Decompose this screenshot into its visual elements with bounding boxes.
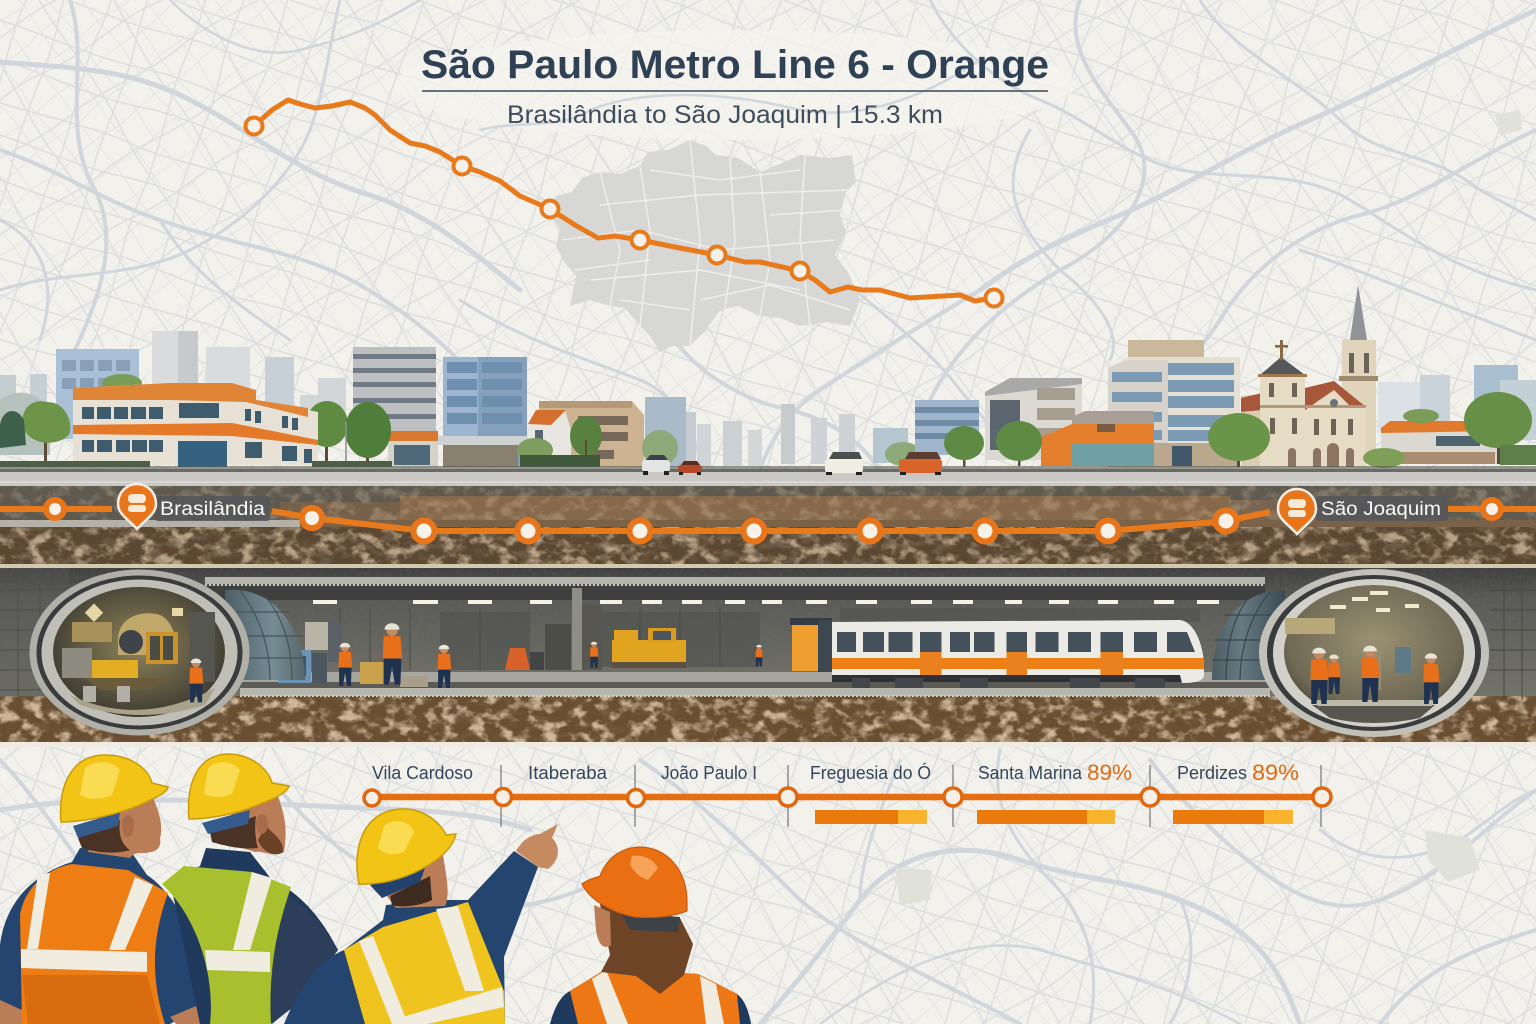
pin	[118, 484, 156, 529]
grey office	[985, 378, 1082, 460]
route stations	[246, 118, 1002, 306]
street	[0, 466, 1536, 487]
timeline	[364, 760, 1331, 827]
station label: Brasilândia	[118, 484, 270, 529]
right tunnel vault	[1212, 590, 1285, 680]
station labels	[372, 762, 1247, 783]
skyline left	[0, 331, 921, 467]
ceiling beam	[205, 577, 1265, 584]
large office	[1108, 340, 1240, 467]
windows	[837, 632, 1195, 652]
blue tower	[438, 357, 532, 467]
far buildings	[0, 331, 346, 455]
far skyline centre	[642, 397, 921, 467]
grey striped tower	[353, 347, 436, 437]
percent labels: 89%	[1087, 760, 1132, 785]
right tunnel portal	[1259, 569, 1489, 737]
progress bars	[815, 810, 1293, 824]
underground route line	[0, 500, 1536, 542]
yellow machine	[612, 628, 686, 668]
orange corner building	[1041, 411, 1154, 466]
station label: São Joaquim: São Joaquim	[1321, 498, 1441, 520]
worker 3 yellow vest pointing	[284, 809, 558, 1024]
station label: Brasilândia: Brasilândia	[160, 498, 265, 520]
timeline line	[372, 794, 1322, 800]
skyline right	[915, 285, 1536, 468]
worker 1 orange vest	[0, 755, 220, 1024]
station labels: João Paulo I	[661, 763, 757, 783]
station labels: Santa Marina	[978, 763, 1083, 783]
percent labels: 89%	[1252, 760, 1299, 785]
worker 4 orange helmet	[550, 847, 751, 1024]
left tunnel portal	[30, 570, 250, 736]
side brick walls	[0, 568, 1536, 700]
platform and rails	[240, 672, 1270, 682]
trees left	[0, 374, 391, 466]
title: São Paulo Metro Line 6 - Orange	[421, 43, 1049, 87]
timeline stations	[364, 788, 1331, 806]
orange stripe	[832, 658, 1204, 669]
trees right	[944, 392, 1536, 468]
route stations	[46, 500, 1501, 542]
small orange annex	[388, 431, 438, 467]
ticks	[501, 765, 1321, 827]
train	[790, 618, 1204, 688]
boring machine	[62, 604, 215, 715]
city silhouette map	[548, 140, 860, 352]
left tunnel vault	[225, 590, 305, 680]
station labels: Perdizes	[1177, 763, 1247, 783]
upper route line	[246, 100, 1002, 306]
far right buildings	[1378, 365, 1536, 440]
percent labels	[1087, 760, 1299, 785]
underground soil layers	[0, 486, 1536, 747]
worker 2 green vest	[162, 754, 338, 1024]
low orange roof building	[1381, 421, 1497, 464]
station label: São Joaquim	[1278, 489, 1448, 534]
pin	[1278, 489, 1316, 534]
house and tan building	[517, 401, 644, 467]
station labels: Itaberaba	[528, 763, 608, 783]
station labels: Vila Cardoso	[372, 763, 473, 783]
ceiling lights	[313, 600, 1219, 604]
blue office	[915, 400, 979, 455]
station tunnel	[0, 568, 1536, 700]
orange school building	[0, 383, 392, 467]
workers group	[1285, 591, 1439, 723]
station labels: Freguesia do Ó	[810, 762, 931, 783]
equipment on platform	[278, 622, 544, 687]
cars	[642, 452, 942, 475]
subtitle: Brasilândia to São Joaquim | 15.3 km	[507, 101, 943, 129]
church	[1241, 285, 1378, 467]
platform workers	[338, 623, 763, 688]
wall panels	[440, 608, 1200, 670]
